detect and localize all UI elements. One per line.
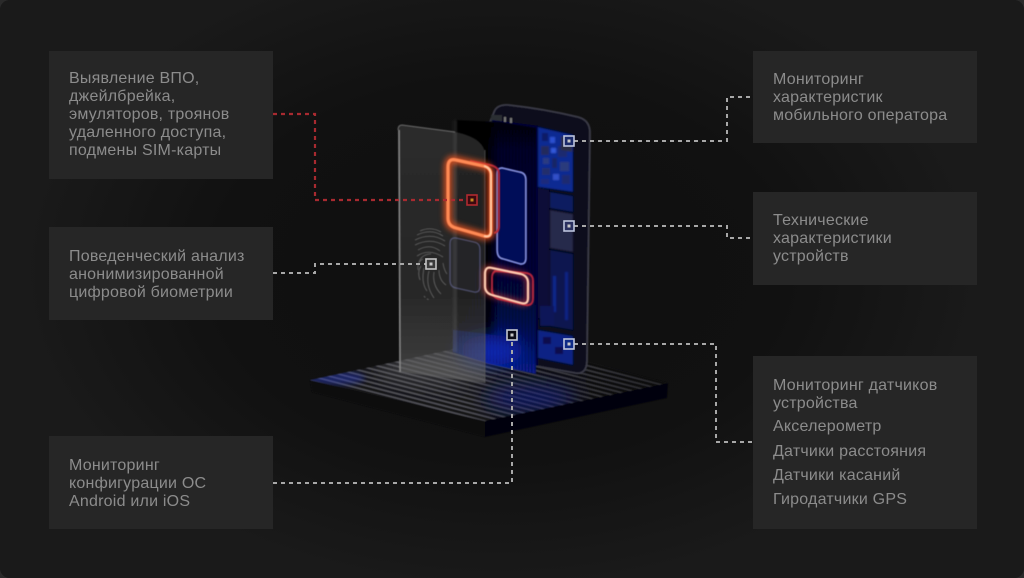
panel: operator monitoring: характеристик	[773, 89, 883, 106]
connector: sensors card to marker	[564, 339, 753, 442]
connector: biometrics card to marker	[273, 259, 436, 273]
phone back with circuit board	[490, 105, 590, 373]
panel: malware detection: эмуляторов, троянов	[69, 106, 229, 123]
highlight: blue tall rectangle	[497, 168, 526, 264]
panel: sensors monitoring: Датчики касаний	[773, 467, 901, 484]
icon: circuit board	[538, 127, 573, 365]
highlight: large orange rectangle	[448, 160, 491, 236]
panel: device specs: характеристики	[773, 230, 892, 247]
connector: device specs card to marker	[564, 221, 753, 238]
panel: behavioural analysis: анонимизированной	[69, 266, 224, 283]
panel: sensors monitoring: устройства	[773, 395, 858, 412]
marker: OS	[507, 330, 517, 340]
panel: OS configuration	[49, 436, 273, 529]
marker: red	[467, 195, 477, 205]
panel: OS configuration: Мониторинг	[69, 457, 160, 474]
panel: operator monitoring	[753, 51, 977, 143]
connector: malware card to marker	[273, 114, 477, 205]
glass screen layer	[398, 120, 485, 383]
icon: fingerprint	[415, 229, 447, 300]
panel: operator monitoring: мобильного оператора	[773, 107, 947, 124]
panel: malware detection	[49, 51, 273, 179]
highlight: red back outline	[470, 161, 533, 305]
panel: device specs	[753, 192, 977, 285]
marker: sensors	[564, 339, 574, 349]
platform	[310, 349, 668, 437]
panel: sensors monitoring: Акселерометр	[773, 418, 881, 435]
middle layer with stripes	[453, 120, 536, 374]
panel: malware detection: подмены SIM-карты	[69, 142, 221, 159]
panel: malware detection: Выявление ВПО,	[69, 70, 199, 87]
panel: behavioural analysis: цифровой биометрии	[69, 284, 233, 301]
marker: operator	[564, 136, 574, 146]
panel: device specs: Технические	[773, 212, 869, 229]
panel: OS configuration: конфигурации ОС	[69, 475, 206, 492]
highlight: small orange rectangle	[485, 268, 528, 303]
panel: operator monitoring: Мониторинг	[773, 71, 864, 88]
panel: malware detection: джейлбрейка,	[69, 88, 175, 105]
panel: sensors monitoring: Мониторинг датчиков	[773, 377, 937, 394]
panel: sensors monitoring: Гиродатчики GPS	[773, 491, 907, 508]
panel: OS configuration: Android или iOS	[69, 493, 190, 510]
marker: fingerprint	[426, 259, 436, 269]
connector: OS card to marker	[273, 330, 517, 483]
marker: specs	[564, 221, 574, 231]
connector: operator card to marker	[564, 97, 753, 146]
panel: sensors monitoring: Датчики расстояния	[773, 443, 926, 460]
panel: sensors monitoring	[753, 356, 977, 529]
panel: behavioural analysis: Поведенческий анализ	[69, 248, 245, 265]
panel: behavioural analysis	[49, 227, 273, 320]
highlight: ghost rectangle	[450, 238, 480, 292]
illustration: exploded phone on platform	[273, 96, 752, 484]
panel: device specs: устройств	[773, 248, 849, 265]
panel: malware detection: удаленного доступа,	[69, 124, 226, 141]
